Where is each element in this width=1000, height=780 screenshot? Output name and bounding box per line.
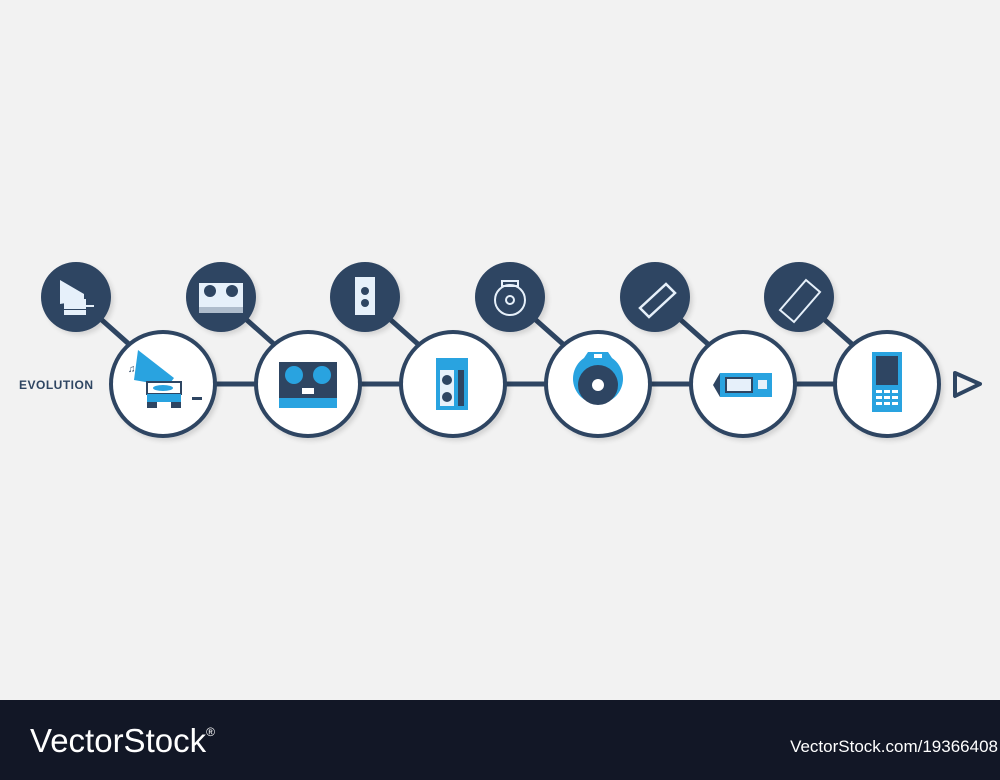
footer bar: VectorStock.com/19366408 — [790, 737, 998, 756]
timeline connectors — [76, 297, 853, 384]
icon: cd small — [495, 281, 525, 315]
big circles — [111, 332, 939, 436]
icon: mobile phone — [872, 352, 902, 412]
footer bar: ® — [206, 725, 215, 739]
icon: cd player — [573, 352, 623, 405]
icon: usb mp3 — [713, 373, 772, 397]
icon: cassette player small — [355, 277, 375, 315]
icon: usb small — [640, 284, 675, 317]
footer bar: VectorStock — [30, 722, 206, 759]
arrow: end triangle — [955, 373, 980, 396]
small circles — [41, 262, 834, 332]
icon: reel-to-reel — [279, 362, 337, 408]
title: EVOLUTION: EVOLUTION — [19, 378, 94, 392]
icon: phone small — [780, 280, 820, 322]
icon: gramophone: ♫ — [128, 364, 136, 375]
icon: cassette player — [436, 358, 468, 410]
icon: reel small — [199, 283, 243, 313]
footer bar — [0, 700, 1000, 780]
icon: gramophone small — [60, 280, 94, 315]
icon: gramophone — [128, 350, 202, 408]
